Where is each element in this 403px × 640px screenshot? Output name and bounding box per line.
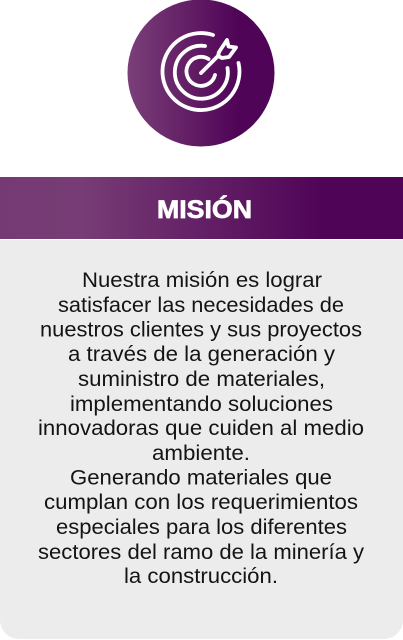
mission text block: Nuestra misión es lograr	[82, 269, 322, 292]
mission text block: implementando soluciones	[70, 393, 333, 416]
panel: text background	[0, 240, 403, 639]
mission text block: innovadoras que cuiden al medio	[38, 417, 364, 440]
mission text block: satisfacer las necesidades de	[58, 294, 344, 317]
mission text block: a través de la generación y	[68, 343, 336, 366]
heading: MISIÓN	[157, 194, 252, 224]
icon: target with arrow	[162, 33, 239, 110]
mission text block: sectores del ramo de la minería y	[38, 541, 365, 564]
mission text block: cumplan con los requerimientos	[44, 491, 358, 514]
mission text block: la construcción.	[124, 565, 278, 588]
icon: target badge	[128, 0, 274, 146]
mission text block: suministro de materiales,	[78, 368, 325, 391]
mission text block: nuestros clientes y sus proyectos	[40, 318, 362, 342]
mission text block: especiales para los diferentes	[56, 516, 347, 539]
mission text block: Generando materiales que	[70, 466, 332, 490]
mission text block	[38, 269, 365, 588]
mission text block: ambiente.	[152, 442, 250, 465]
title band	[0, 177, 403, 239]
